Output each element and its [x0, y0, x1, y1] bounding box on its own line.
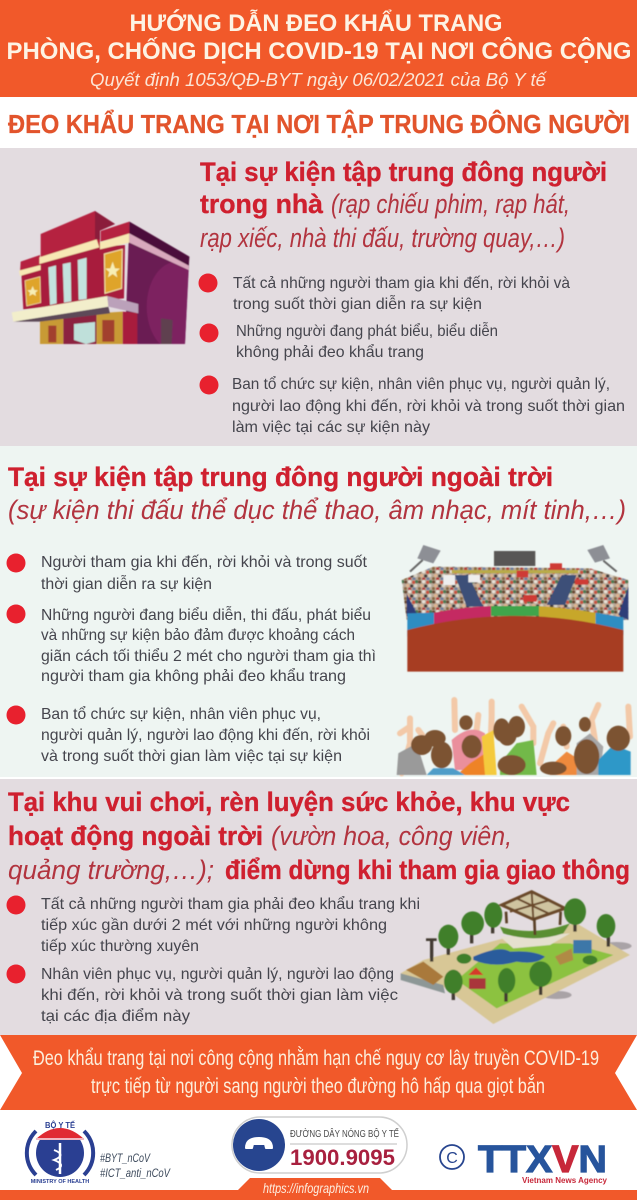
hashtags: #ICT_anti_nCoV: [100, 1166, 171, 1180]
heading: parks: Tại khu vui chơi, rèn luyện sức khỏe, khu vực: [8, 787, 570, 817]
illustration: park: [401, 892, 632, 1024]
bullet 1: thời gian diễn ra sự kiện: [41, 574, 212, 593]
footer bar: https://infographics.vn: [263, 1180, 369, 1196]
heading: indoor events: trong nhà: [200, 189, 324, 219]
logo: Ministry of Health: BỘ Y TẾ: [45, 1120, 76, 1130]
heading: parks: (vườn hoa, công viên,: [271, 821, 512, 851]
footer bar: [0, 1178, 637, 1200]
panel: outdoor events: [0, 446, 637, 777]
bullet 1: trong suốt thời gian diễn ra sự kiện: [233, 294, 482, 313]
bullet 2: không phải đeo khẩu trang: [236, 343, 424, 361]
title: [6, 8, 632, 65]
bullet 3: Ban tổ chức sự kiện, nhân viên phục vụ,: [41, 705, 321, 723]
bullet 3: người lao động khi đến, rời khỏi và trong suốt thời gian: [232, 398, 625, 415]
copyright symbol: C: [446, 1150, 458, 1167]
heading: parks: [8, 787, 630, 885]
bullet 1: [6, 554, 368, 593]
header panel: [0, 0, 637, 97]
bullet 2: Những người đang phát biểu, biểu diễn: [236, 321, 498, 340]
bullet 1: [6, 895, 420, 955]
hashtags: [100, 1151, 171, 1180]
illustration: stadium: [402, 545, 628, 672]
bullet 1: tiếp xúc gần dưới 2 mét với những người không: [41, 917, 387, 934]
icon: phone: [233, 1119, 285, 1171]
heading: outdoor events: Tại sự kiện tập trung đông người ngoài trời: [8, 462, 553, 492]
bullet 3: làm việc tại các sự kiện này: [232, 419, 430, 436]
heading: outdoor events: [8, 462, 626, 525]
bullet 2: khi đến, rời khỏi và trong suốt thời gian làm việc: [41, 987, 398, 1004]
panel: indoor events: [0, 148, 637, 446]
bullet 3: [6, 705, 370, 765]
bullet 2: tại các địa điểm này: [41, 1007, 190, 1025]
bullet 2: Những người đang biểu diễn, thi đấu, phát biểu: [41, 605, 371, 624]
bullet 2: giãn cách tối thiểu 2 mét cho người tham gia thì: [41, 647, 376, 665]
copyright symbol: [440, 1145, 464, 1169]
title: PHÒNG, CHỐNG DỊCH COVID-19 TẠI NƠI CÔNG CỘNG: [6, 37, 632, 65]
panel: parks and outdoor areas: [0, 779, 637, 1035]
bullet 2: [200, 321, 498, 361]
logo: TTXVN: TTXVN: [478, 1139, 607, 1181]
heading: parks: hoạt động ngoài trời: [8, 821, 263, 851]
bullet 2: [6, 964, 398, 1025]
heading: parks: quảng trường,…);: [8, 855, 214, 885]
hashtags: #BYT_nCoV: [100, 1151, 151, 1165]
hotline: 1900.9095: [290, 1145, 395, 1170]
subtitle: Quyết định 1053/QĐ-BYT ngày 06/02/2021 của Bộ Y tế: [90, 69, 548, 90]
bullet 3: Ban tổ chức sự kiện, nhân viên phục vụ, người quản lý,: [232, 375, 610, 393]
bullet 3: và trong suốt thời gian làm việc tại sự kiện: [41, 748, 342, 765]
bullet 2: [6, 604, 376, 685]
illustration: cheering crowd: [397, 700, 631, 775]
bullet 2: Nhân viên phục vụ, người quản lý, người lao động: [41, 966, 394, 983]
bullet 3: người quản lý, người lao động khi đến, rời khỏi: [41, 727, 370, 744]
bullet 3: [200, 375, 625, 436]
banner: [0, 1035, 637, 1110]
bullet 2: người tham gia không phải đeo khẩu trang: [41, 667, 346, 685]
heading: indoor events: Tại sự kiện tập trung đông người: [200, 157, 607, 187]
title: HƯỚNG DẪN ĐEO KHẨU TRANG: [130, 8, 502, 37]
heading: indoor events: [200, 157, 607, 253]
bullet 1: Tất cả những người tham gia khi đến, rời khỏi và: [233, 275, 570, 292]
hotline: ĐƯỜNG DÂY NÓNG BỘ Y TẾ: [290, 1127, 399, 1140]
bullet 2: và những sự kiện bảo đảm được khoảng cách: [41, 627, 355, 644]
logo: TTXVN: Vietnam News Agency: [522, 1175, 607, 1185]
bullet 1: [198, 274, 570, 313]
logo: Ministry of Health: [27, 1120, 93, 1185]
bullet 1: Người tham gia khi đến, rời khỏi và trong suốt: [41, 554, 368, 571]
bullet 1: tiếp xúc thường xuyên: [41, 938, 199, 955]
logo: Ministry of Health: MINISTRY OF HEALTH: [31, 1179, 89, 1185]
hotline: [232, 1117, 407, 1173]
heading: indoor events: (rạp chiếu phim, rạp hát,: [331, 189, 570, 219]
icon: theatre building: [12, 210, 190, 345]
bullet 1: Tất cả những người tham gia phải đeo khẩu trang khi: [41, 895, 420, 913]
heading: indoor events: rạp xiếc, nhà thi đấu, trường quay,…): [200, 223, 565, 253]
